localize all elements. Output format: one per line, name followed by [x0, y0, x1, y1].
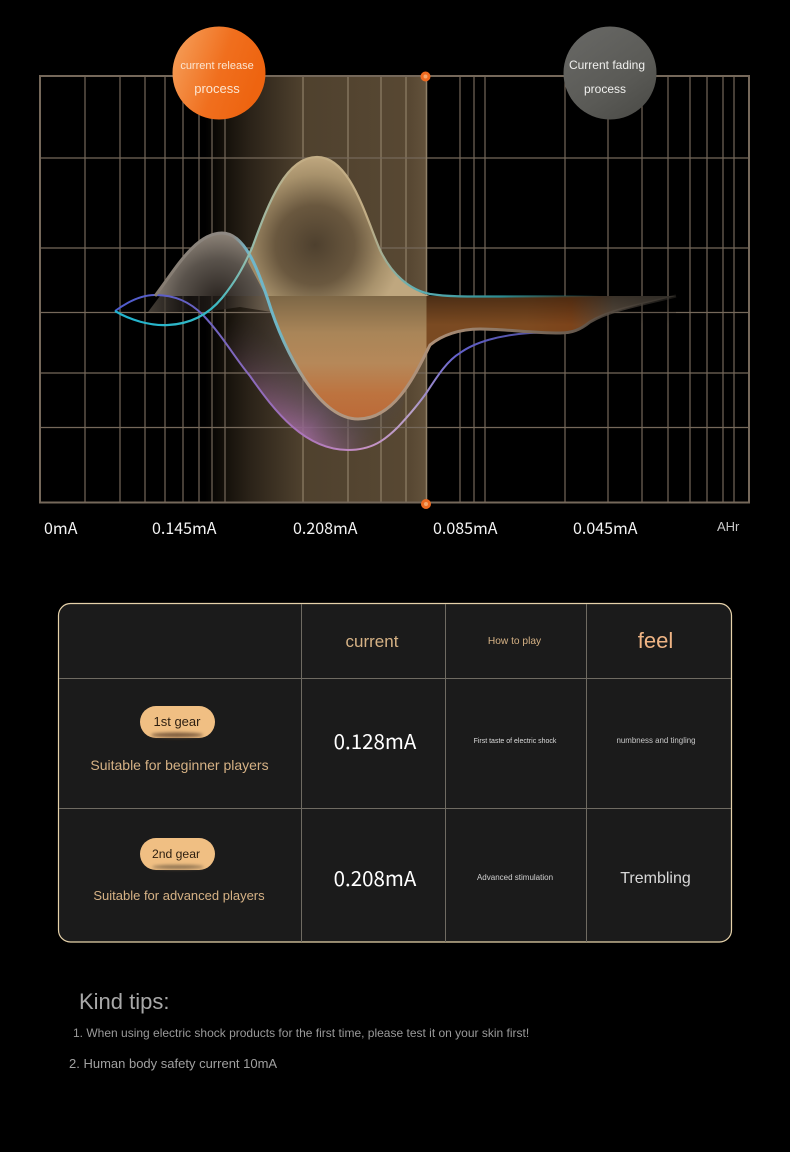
text: advanced stimulation: Advanced stimulation — [477, 873, 553, 882]
badge: current fading process — [564, 26, 656, 120]
axis labels: AHr — [717, 519, 740, 534]
badge: current fading process: Current fading — [569, 58, 645, 72]
blue to purple curve — [115, 295, 565, 450]
header: feel: feel — [638, 628, 673, 653]
panel: gear table — [58, 604, 732, 942]
row: 1st gear — [90, 706, 269, 773]
row: 2nd gear — [93, 838, 265, 903]
shaded current release band — [205, 76, 426, 502]
value: 0.128mA: 0.128mA — [334, 725, 417, 755]
teal curve — [115, 157, 600, 325]
kind tips — [69, 989, 529, 1071]
axis labels: 0.208mA — [293, 515, 358, 539]
axis labels: 0mA — [44, 515, 78, 539]
header: how to play: How to play — [488, 636, 542, 647]
marker: bottom — [421, 499, 431, 509]
badge: current release process: current release — [180, 60, 254, 72]
tips heading: Kind tips: — [79, 989, 170, 1014]
purple gradient area — [227, 323, 382, 449]
tip 1: 1. When using electric shock products for the first time, please test it on your skin first! — [73, 1026, 529, 1040]
shadow below grey hump — [148, 296, 272, 312]
header: current: current — [346, 632, 399, 651]
tip 2: 2. Human body safety current 10mA — [69, 1056, 277, 1071]
text: first taste: First taste of electric shock — [474, 738, 557, 745]
row: 1st gear: 1st gear — [154, 714, 201, 729]
row: 1st gear: Suitable for beginner players — [90, 757, 269, 773]
badge: current fading process: process — [584, 82, 626, 96]
text: numbness: numbness and tingling — [617, 736, 695, 745]
orange area left — [268, 296, 426, 418]
grey hump fill — [155, 233, 268, 296]
marker: top — [420, 72, 430, 82]
tan hump fill — [248, 157, 430, 296]
orange area right — [426, 296, 676, 348]
axis labels — [44, 515, 740, 539]
row: 2nd gear: 2nd gear — [152, 847, 200, 861]
row: 2nd gear: Suitable for advanced players — [93, 888, 265, 903]
value: 0.208mA: 0.208mA — [334, 862, 417, 892]
text: trembling: Trembling — [620, 870, 691, 887]
axis labels: 0.145mA — [152, 515, 217, 539]
grey to orange edge curve — [155, 233, 676, 419]
axis labels: 0.085mA — [433, 515, 498, 539]
badge: current release process — [172, 26, 266, 120]
axis labels: 0.045mA — [573, 515, 638, 539]
panel: current curve chart — [40, 26, 749, 539]
badge: current release process: process — [194, 81, 240, 96]
